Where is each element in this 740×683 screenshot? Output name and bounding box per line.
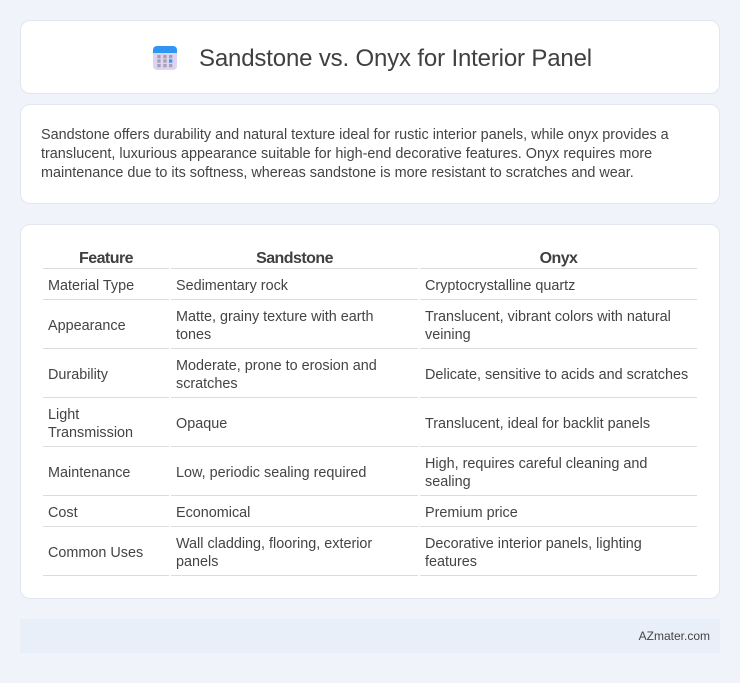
- comparison table: [43, 250, 697, 576]
- row: cost: [48, 505, 518, 521]
- row: light transmission: Translucent, ideal for backlit panels: [425, 416, 650, 432]
- row: common uses: Wall cladding, flooring, exterior: [176, 536, 372, 552]
- row: maintenance: sealing: [425, 474, 471, 490]
- row: cost: Economical: [176, 505, 250, 521]
- row: appearance: Appearance: [48, 318, 126, 334]
- summary text: [41, 127, 669, 181]
- panel: comparison table: [20, 224, 720, 599]
- row: durability: scratches: [176, 376, 238, 392]
- row: common uses: features: [425, 554, 477, 570]
- row: common uses: Common Uses: [48, 545, 143, 561]
- column headers: Onyx: [540, 250, 577, 267]
- footer bar: [20, 619, 720, 653]
- summary text: translucent, luxurious appearance suitable for high-end decorative features. Onyx requires more: [41, 146, 652, 162]
- row: appearance: tones: [176, 327, 211, 343]
- row: appearance: Matte, grainy texture with earth: [176, 309, 374, 325]
- summary text: Sandstone offers durability and natural texture ideal for rustic interior panels, while onyx provides a: [41, 127, 669, 143]
- row: appearance: Translucent, vibrant colors with natural: [425, 309, 671, 325]
- row: cost: Premium price: [425, 505, 518, 521]
- row: light transmission: Light: [48, 407, 79, 423]
- footer credit: AZmater.com: [639, 629, 710, 643]
- row: durability: Durability: [48, 367, 108, 383]
- row: material type: Sedimentary rock: [176, 278, 288, 294]
- row: appearance: [48, 309, 671, 343]
- title: Sandstone vs. Onyx for Interior Panel: [199, 45, 592, 72]
- column headers: [79, 250, 578, 267]
- row: common uses: panels: [176, 554, 218, 570]
- row: maintenance: Low, periodic sealing required: [176, 465, 366, 481]
- row: maintenance: High, requires careful cleaning and: [425, 456, 647, 472]
- row: durability: [48, 358, 688, 392]
- panel: title card: [20, 20, 720, 94]
- row: maintenance: Maintenance: [48, 465, 130, 481]
- row: maintenance: [48, 456, 647, 490]
- row: common uses: Decorative interior panels, lighting: [425, 536, 642, 552]
- row: light transmission: Opaque: [176, 416, 227, 432]
- summary text: maintenance due to its softness, whereas sandstone is more resistant to scratches and wear.: [41, 165, 634, 181]
- row: light transmission: Transmission: [48, 425, 133, 441]
- panel: summary: [20, 104, 720, 204]
- row: durability: Moderate, prone to erosion and: [176, 358, 377, 374]
- row: light transmission: [48, 407, 650, 441]
- row: material type: [48, 278, 575, 294]
- row: material type: Cryptocrystalline quartz: [425, 278, 575, 294]
- row: cost: Cost: [48, 505, 78, 521]
- row: appearance: veining: [425, 327, 471, 343]
- column headers: Sandstone: [256, 250, 333, 267]
- column headers: Feature: [79, 250, 133, 267]
- row: common uses: [48, 536, 642, 570]
- row: material type: Material Type: [48, 278, 134, 294]
- row: durability: Delicate, sensitive to acids and scratches: [425, 367, 688, 383]
- icon: calendar: [153, 46, 177, 70]
